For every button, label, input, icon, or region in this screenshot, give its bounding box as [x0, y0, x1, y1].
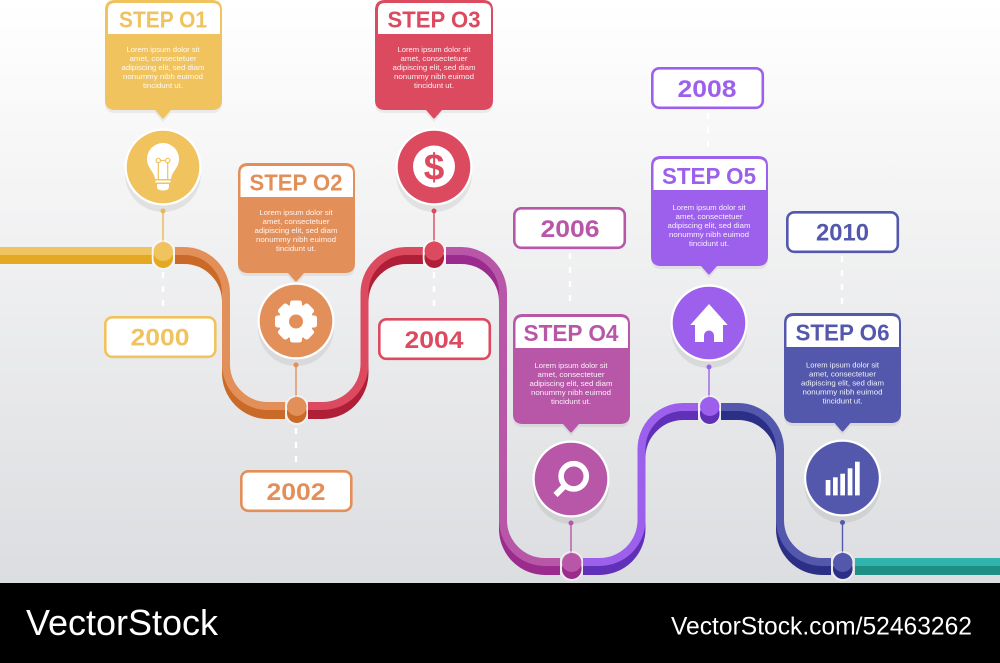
callout: step 5: Lorem ipsum dolor sit — [672, 203, 746, 212]
callout: step 3: STEP O3 — [388, 6, 480, 32]
step 6 — [784, 212, 901, 581]
callout: step 5: amet, consectetuer — [676, 212, 743, 221]
callout: step 6: adipiscing elit, sed diam — [801, 378, 884, 388]
callout: step 1: STEP O1 — [119, 6, 207, 32]
callout: step 3 — [375, 0, 493, 122]
callout: step 3: Lorem ipsum dolor sit — [398, 45, 470, 54]
callout: step 6: STEP O6 — [796, 320, 890, 346]
icon: house — [670, 284, 748, 368]
step 5 — [651, 68, 768, 425]
callout: step 3: nonummy nibh euimod — [394, 72, 474, 81]
callout: step 2: amet, consectetuer — [262, 217, 330, 226]
connector and node — [285, 362, 308, 425]
footer url: VectorStock.com/52463262 — [671, 612, 972, 640]
connector and node — [831, 520, 854, 581]
callout: step 6: tincidunt ut. — [822, 396, 862, 406]
year: 2008 — [652, 68, 763, 108]
callout: step 5: tincidunt ut. — [689, 239, 729, 248]
callout: step 1 — [105, 0, 222, 122]
track: orange — [175, 251, 285, 415]
callout: step 1: nonummy nibh euimod — [123, 72, 203, 81]
year: 2000 — [105, 317, 215, 357]
callout: step 5 — [651, 156, 768, 278]
callout: step 3: amet, consectetuer — [400, 54, 468, 63]
year: 2008: 2008 — [678, 76, 736, 103]
callout: step 4: STEP O4 — [524, 320, 619, 346]
callout: step 4: adipiscing elit, sed diam — [530, 379, 612, 388]
callout: step 5: adipiscing elit, sed diam — [668, 221, 750, 230]
callout: step 2: STEP O2 — [250, 170, 342, 196]
connector and node — [152, 208, 174, 270]
step 2 — [238, 163, 355, 511]
callout: step 6: nonummy nibh euimod — [802, 388, 882, 396]
callout: step 4 — [513, 314, 630, 436]
callout: step 6 — [784, 313, 901, 435]
connector and node — [698, 364, 721, 425]
step 1 — [105, 0, 222, 357]
callout: step 6: Lorem ipsum dolor sit — [806, 360, 879, 370]
callout: step 6: amet, consectetuer — [809, 370, 877, 378]
callout: step 4: nonummy nibh euimod — [531, 388, 611, 397]
footer brand: VectorStock — [26, 602, 219, 643]
callout: step 2 — [238, 163, 355, 285]
year: 2002 — [241, 471, 351, 511]
icon: magnifier — [532, 440, 610, 524]
icon: dollar — [396, 128, 472, 212]
connector and node — [422, 208, 446, 270]
dashed connector lines — [163, 113, 842, 466]
track: red — [308, 251, 423, 415]
icon: bar chart — [804, 440, 881, 523]
callout: step 3: tincidunt ut. — [414, 81, 454, 90]
callout: step 2: tincidunt ut. — [276, 244, 316, 253]
callout: step 5: nonummy nibh euimod — [669, 230, 749, 239]
track: start yellow — [0, 247, 152, 264]
callout: step 1: adipiscing elit, sed diam — [122, 63, 204, 72]
year: 2010: 2010 — [816, 220, 869, 246]
track: violet — [583, 407, 698, 571]
connector and node — [560, 520, 583, 581]
step 3 — [375, 0, 493, 359]
callout: step 4: amet, consectetuer — [538, 370, 605, 379]
year: 2006 — [514, 208, 625, 248]
callout: step 1: tincidunt ut. — [143, 81, 183, 90]
icon: light bulb — [124, 128, 202, 212]
callout: step 2: Lorem ipsum dolor sit — [260, 208, 332, 217]
callout: step 4: Lorem ipsum dolor sit — [534, 361, 608, 370]
callout: step 1: amet, consectetuer — [130, 54, 197, 63]
year: 2004: 2004 — [404, 327, 464, 354]
track: end teal — [855, 558, 1000, 575]
year: 2004 — [379, 319, 490, 359]
footer band — [0, 583, 1000, 663]
callout: step 1: Lorem ipsum dolor sit — [126, 45, 200, 54]
callout: step 4: tincidunt ut. — [551, 397, 591, 406]
callout: step 2: adipiscing elit, sed diam — [254, 226, 338, 235]
timeline track — [0, 247, 1000, 575]
step 4 — [513, 208, 630, 581]
track: magenta — [446, 251, 560, 571]
callout: step 3: adipiscing elit, sed diam — [392, 63, 476, 72]
callout: step 5: STEP O5 — [662, 163, 756, 189]
year: 2010 — [787, 212, 898, 252]
icon: dollar: $ — [424, 146, 445, 188]
icon: gear — [258, 282, 334, 366]
callout: step 2: nonummy nibh euimod — [256, 235, 336, 244]
track: blue — [721, 407, 831, 571]
year: 2002: 2002 — [266, 479, 326, 506]
year: 2000: 2000 — [130, 324, 190, 352]
year: 2006: 2006 — [540, 216, 600, 243]
